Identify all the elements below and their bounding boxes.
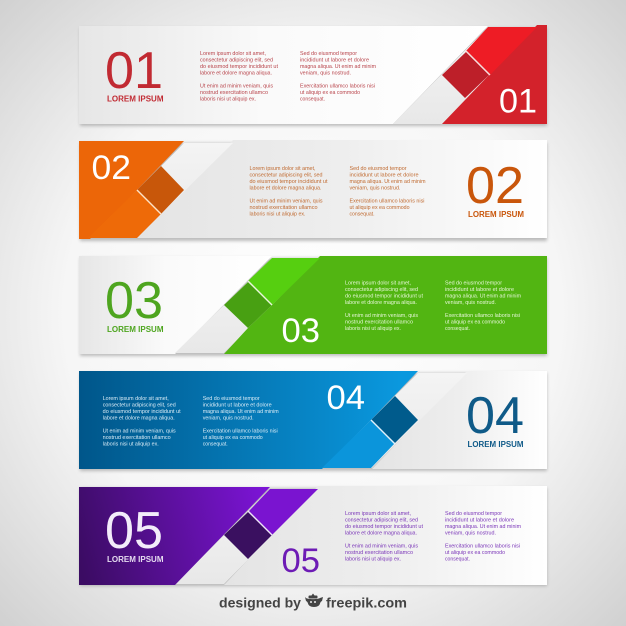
text columns: consectetur adipiscing elit, sed: [103, 402, 176, 408]
icon: red diamond: [442, 52, 489, 98]
text columns: nostrud exercitation ullamco: [200, 90, 268, 96]
label: LOREM IPSUM: [468, 439, 524, 449]
text columns: [250, 166, 426, 218]
big number 02: 02: [466, 157, 524, 215]
panel: banner 05 purple: [79, 486, 547, 586]
panel: banner 01 red: [79, 25, 547, 126]
icon: freepik logo: [305, 594, 323, 607]
small number 05: 05: [282, 542, 320, 580]
icon: blue diamond: [371, 396, 418, 443]
text columns: veniam, quis nostrud.: [350, 186, 400, 192]
icon: orange diamond: [137, 166, 184, 214]
label: LOREM IPSUM: [107, 94, 164, 104]
label: LOREM IPSUM: [107, 324, 164, 334]
text columns: Lorem ipsum dolor sit amet,: [103, 396, 169, 402]
text columns: Lorem ipsum dolor sit amet,: [200, 51, 266, 57]
text columns: veniam, quis nostrud.: [445, 530, 496, 536]
text columns: laboris nisi ut aliquip ex.: [250, 212, 306, 218]
text columns: do eiusmod tempor incididunt ut: [345, 294, 424, 300]
label: LOREM IPSUM: [107, 554, 164, 564]
panel: banner 03 green: [79, 256, 547, 356]
text columns: [345, 511, 521, 562]
text columns: magna aliqua. Ut enim ad minim: [300, 64, 376, 70]
text columns: labore et dolore magna aliqua.: [345, 300, 417, 306]
text columns: Exercitation ullamco laboris nisi: [445, 544, 520, 550]
text columns: ut aliquip ex ea commodo: [445, 550, 505, 556]
text columns: Sed do eiusmod tempor: [350, 166, 407, 172]
text columns: magna aliqua. Ut enim ad minim: [445, 294, 521, 300]
text columns: do eiusmod tempor incididunt ut: [250, 179, 328, 185]
text columns: labore et dolore magna aliqua.: [200, 70, 272, 76]
text columns: Exercitation ullamco laboris nisi: [203, 428, 278, 434]
footer: credit: freepik.com: [326, 594, 407, 610]
text columns: Ut enim ad minim veniam, quis: [345, 313, 418, 319]
text columns: consectetur adipiscing elit, sed: [345, 518, 418, 524]
text columns: consectetur adipiscing elit, sed: [250, 172, 322, 178]
text columns: consequat.: [300, 96, 325, 102]
big number 04: 04: [466, 387, 524, 445]
icon: green diamond: [224, 282, 272, 328]
text columns: [200, 51, 376, 102]
big number 01: 01: [105, 42, 163, 100]
panel: banner 04 blue: [79, 371, 547, 471]
text columns: Lorem ipsum dolor sit amet,: [250, 166, 316, 172]
text columns: incididunt ut labore et dolore: [445, 518, 514, 524]
footer: credit: [219, 594, 407, 610]
text columns: Sed do eiusmod tempor: [445, 511, 502, 517]
text columns: consectetur adipiscing elit, sed: [200, 58, 273, 64]
text columns: incididunt ut labore et dolore: [203, 402, 272, 408]
text columns: consequat.: [350, 212, 374, 218]
text columns: Lorem ipsum dolor sit amet,: [345, 280, 411, 286]
text columns: [103, 396, 279, 448]
text columns: Lorem ipsum dolor sit amet,: [345, 511, 411, 517]
text columns: do eiusmod tempor incididunt ut: [200, 64, 279, 70]
text columns: nostrud exercitation ullamco: [345, 320, 413, 326]
text columns: laboris nisi ut aliquip ex.: [103, 442, 159, 448]
icon: purple diamond: [224, 512, 272, 559]
text columns: labore et dolore magna aliqua.: [103, 416, 175, 422]
text columns: laboris nisi ut aliquip ex.: [200, 96, 256, 102]
text columns: veniam, quis nostrud.: [445, 300, 496, 306]
text columns: Sed do eiusmod tempor: [203, 396, 260, 402]
text columns: Exercitation ullamco laboris nisi: [350, 198, 424, 204]
small number 01: 01: [499, 82, 537, 120]
text columns: Ut enim ad minim veniam, quis: [103, 428, 176, 434]
text columns: incididunt ut labore et dolore: [300, 58, 369, 64]
text columns: consectetur adipiscing elit, sed: [345, 287, 418, 293]
text columns: Ut enim ad minim veniam, quis: [345, 544, 418, 550]
small number 04: 04: [326, 379, 365, 417]
text columns: do eiusmod tempor incididunt ut: [103, 409, 181, 415]
small number 02: 02: [92, 149, 131, 187]
label: LOREM IPSUM: [468, 209, 524, 219]
text columns: labore et dolore magna aliqua.: [345, 530, 417, 536]
small number 03: 03: [282, 312, 320, 350]
text columns: ut aliquip ex ea commodo: [350, 205, 410, 211]
text columns: ut aliquip ex ea commodo: [445, 320, 505, 326]
text columns: magna aliqua. Ut enim ad minim: [445, 524, 521, 530]
text columns: Ut enim ad minim veniam, quis: [200, 84, 273, 90]
text columns: consequat.: [445, 326, 470, 332]
text columns: incididunt ut labore et dolore: [445, 287, 514, 293]
text columns: laboris nisi ut aliquip ex.: [345, 556, 401, 562]
text columns: [345, 280, 521, 332]
text columns: Sed do eiusmod tempor: [300, 51, 357, 57]
text columns: magna aliqua. Ut enim ad minim: [203, 409, 279, 415]
text columns: veniam, quis nostrud.: [300, 70, 351, 76]
text columns: consequat.: [445, 556, 470, 562]
panel: banner 02 orange: [79, 140, 547, 241]
text columns: Exercitation ullamco laboris nisi: [300, 84, 375, 90]
text columns: Ut enim ad minim veniam, quis: [250, 198, 323, 204]
text columns: nostrud exercitation ullamco: [250, 205, 318, 211]
text columns: labore et dolore magna aliqua.: [250, 186, 322, 192]
text columns: magna aliqua. Ut enim ad minim: [350, 179, 426, 185]
big number 03: 03: [105, 272, 163, 330]
text columns: Sed do eiusmod tempor: [445, 280, 502, 286]
text columns: laboris nisi ut aliquip ex.: [345, 326, 401, 332]
text columns: do eiusmod tempor incididunt ut: [345, 524, 424, 530]
text columns: Exercitation ullamco laboris nisi: [445, 313, 520, 319]
text columns: nostrud exercitation ullamco: [345, 550, 413, 556]
text columns: nostrud exercitation ullamco: [103, 435, 171, 441]
text columns: veniam, quis nostrud.: [203, 416, 254, 422]
text columns: ut aliquip ex ea commodo: [300, 90, 360, 96]
text columns: incididunt ut labore et dolore: [350, 172, 418, 178]
footer: credit: designed by: [219, 594, 301, 610]
big number 05: 05: [105, 502, 163, 560]
text columns: consequat.: [203, 442, 228, 448]
text columns: ut aliquip ex ea commodo: [203, 435, 263, 441]
